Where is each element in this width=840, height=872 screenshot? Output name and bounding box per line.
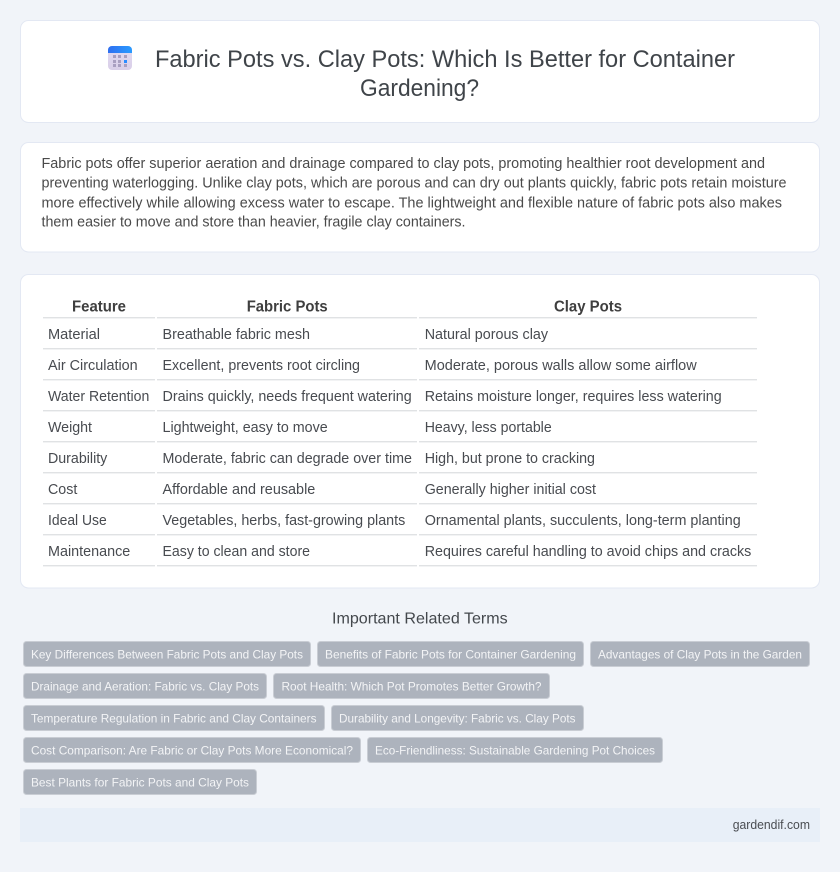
table row: ideal use: Ornamental plants, succulents, long-term planting <box>425 513 741 529</box>
tag <box>24 770 256 794</box>
tag: Eco-Friendliness: Sustainable Gardening Pot Choices <box>375 743 655 757</box>
tag <box>368 738 662 762</box>
tag list: related terms <box>24 642 810 794</box>
tag: Benefits of Fabric Pots for Container Gardening <box>325 647 576 661</box>
title: Gardening? <box>360 75 479 102</box>
table row: material: Material <box>48 327 100 343</box>
title <box>155 46 735 102</box>
table row: ideal use <box>43 513 757 535</box>
table row: maintenance: Requires careful handling to avoid chips and cracks <box>425 544 751 560</box>
tag: Drainage and Aeration: Fabric vs. Clay Pots <box>31 679 259 693</box>
table header row: Clay Pots <box>554 299 622 316</box>
table row: durability: Durability <box>48 451 108 467</box>
table row: maintenance: Easy to clean and store <box>162 544 310 560</box>
table row: maintenance: Maintenance <box>48 544 130 560</box>
table row: water retention: Water Retention <box>48 389 149 405</box>
table row: air circulation: Air Circulation <box>48 358 138 374</box>
table row: water retention <box>43 389 757 411</box>
tag <box>318 642 584 666</box>
table row: ideal use: Vegetables, herbs, fast-growing plants <box>162 513 405 529</box>
tag: Key Differences Between Fabric Pots and Clay Pots <box>31 647 303 661</box>
tag <box>332 706 584 730</box>
table row: weight <box>43 420 757 442</box>
tag: Cost Comparison: Are Fabric or Clay Pots More Economical? <box>31 743 353 757</box>
tag: Best Plants for Fabric Pots and Clay Pots <box>31 775 249 789</box>
table row: material: Breathable fabric mesh <box>162 327 310 343</box>
tag <box>24 642 310 666</box>
tag <box>274 674 550 698</box>
table header row: Feature <box>72 299 126 316</box>
panel: introduction <box>20 142 820 252</box>
tag: Temperature Regulation in Fabric and Clay Containers <box>31 711 316 725</box>
table row: maintenance <box>43 544 757 566</box>
table row: weight: Heavy, less portable <box>425 420 552 436</box>
panel: header <box>20 20 820 122</box>
panel: comparison table <box>20 274 820 588</box>
table row: air circulation: Moderate, porous walls allow some airflow <box>425 358 697 374</box>
tag <box>24 706 324 730</box>
text block: introduction paragraph <box>42 156 786 231</box>
tag <box>590 642 810 666</box>
table row: cost <box>43 482 757 504</box>
heading: important related terms: Important Related Terms <box>332 610 508 628</box>
tag <box>24 738 360 762</box>
table row: durability: Moderate, fabric can degrade over time <box>162 451 412 467</box>
title: Fabric Pots vs. Clay Pots: Which Is Better for Container <box>155 46 735 73</box>
table row: weight: Weight <box>48 420 92 436</box>
text block: introduction paragraph: preventing waterlogging. Unlike clay pots, which are porous and can dry out plants quickly, fabric pots retain moisture <box>42 176 786 192</box>
table row: air circulation: Excellent, prevents root circling <box>162 358 360 374</box>
footer <box>20 808 820 842</box>
table header row <box>43 299 757 318</box>
tag: Durability and Longevity: Fabric vs. Clay Pots <box>339 711 576 725</box>
table row: water retention: Retains moisture longer, requires less watering <box>425 389 722 405</box>
table row: material <box>43 327 757 349</box>
table row: material: Natural porous clay <box>425 327 549 343</box>
text block: introduction paragraph: them easier to move and store than heavier, fragile clay containers. <box>42 215 466 231</box>
table row: durability <box>43 451 757 473</box>
icon: calendar <box>108 46 132 70</box>
tag: Root Health: Which Pot Promotes Better Growth? <box>282 679 542 693</box>
table row: durability: High, but prone to cracking <box>425 451 595 467</box>
table row: cost: Generally higher initial cost <box>425 482 596 498</box>
table header row: Fabric Pots <box>247 299 328 316</box>
table row: weight: Lightweight, easy to move <box>162 420 328 436</box>
tag: Advantages of Clay Pots in the Garden <box>598 647 802 661</box>
text block: introduction paragraph: Fabric pots offer superior aeration and drainage compared to clay pots, promoting healthier root development and <box>42 156 765 172</box>
table row: cost: Affordable and reusable <box>162 482 315 498</box>
text block: introduction paragraph: more effectively while allowing excess water to escape. The lightweight and flexible nature of fabric pots also makes <box>42 196 782 212</box>
table row: air circulation <box>43 358 757 380</box>
table row: water retention: Drains quickly, needs frequent watering <box>162 389 412 405</box>
table row: ideal use: Ideal Use <box>48 513 107 529</box>
table row: cost: Cost <box>48 482 77 498</box>
tag <box>24 674 266 698</box>
footer credit: gardendif.com <box>733 817 810 832</box>
